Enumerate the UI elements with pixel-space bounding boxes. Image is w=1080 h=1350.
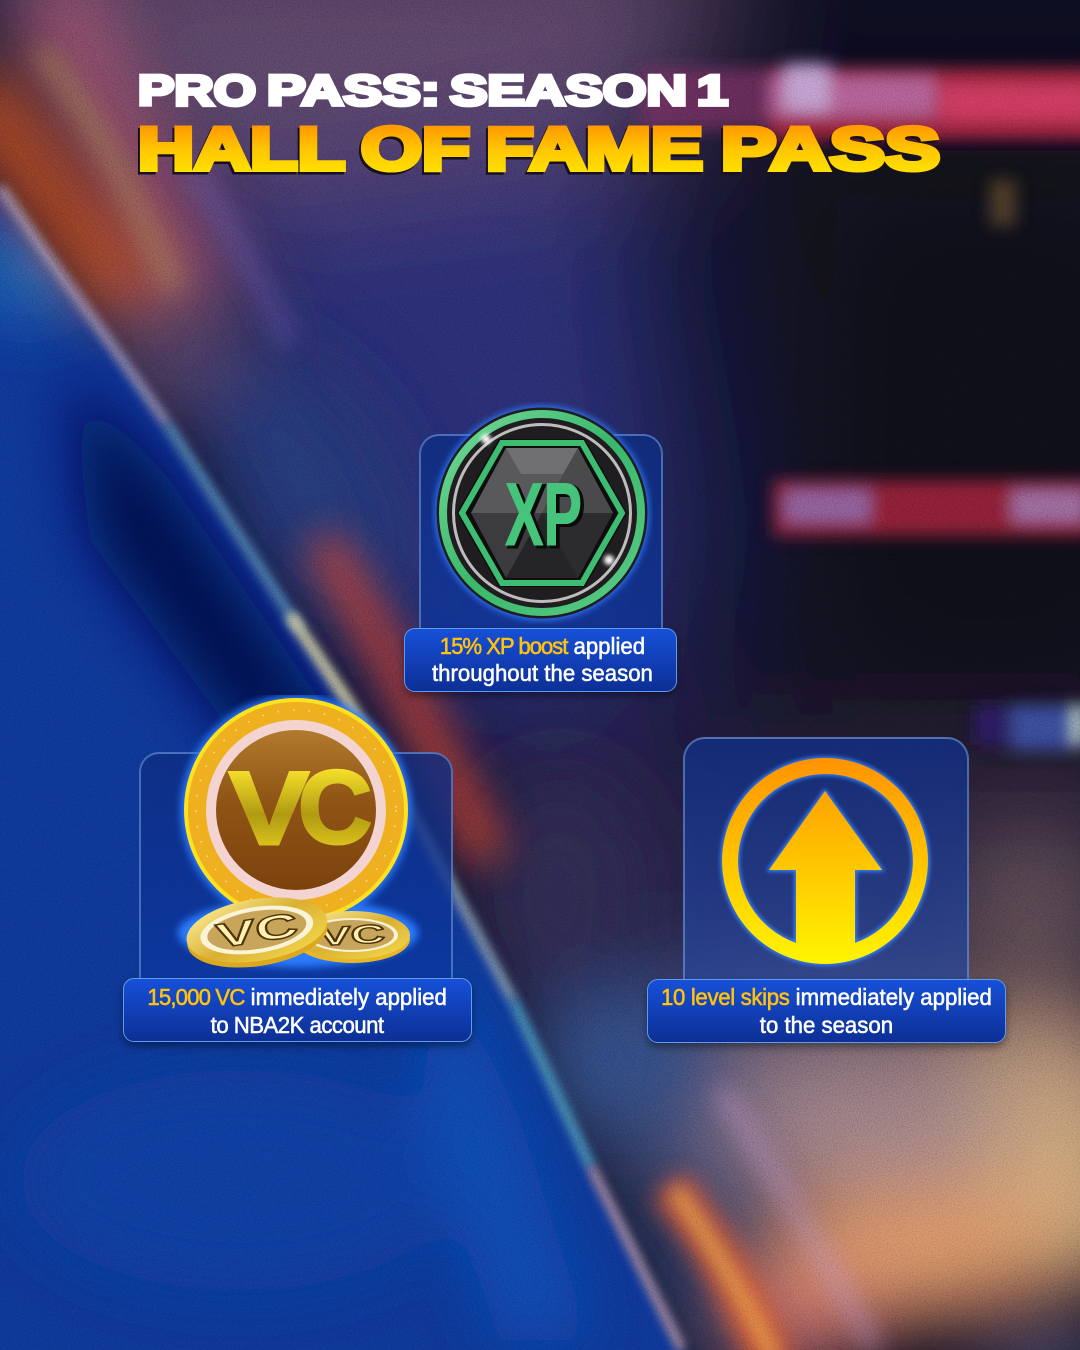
title line 2: FAME bbox=[486, 116, 703, 182]
caption: VC: to NBA2K account bbox=[211, 1012, 384, 1038]
VC letters: V bbox=[229, 751, 309, 867]
VC letters: C bbox=[298, 750, 372, 866]
icon: XP badge: XP bbox=[505, 464, 582, 564]
VC letters bbox=[229, 750, 372, 867]
small coin back: VC bbox=[318, 918, 386, 952]
caption: level skips bbox=[647, 979, 1006, 1043]
caption: VC bbox=[123, 978, 472, 1042]
caption: level skips: 10 level skips immediately applied bbox=[661, 984, 992, 1010]
title line 1 bbox=[138, 67, 728, 115]
title line 1: PRO bbox=[138, 67, 256, 115]
caption: XP boost bbox=[404, 628, 677, 692]
icon: XP badge bbox=[431, 402, 653, 624]
caption: level skips: to the season bbox=[760, 1012, 893, 1038]
small coin front bbox=[182, 888, 333, 977]
title line 1: PASS: bbox=[267, 67, 440, 115]
caption: XP boost: 15% XP boost applied bbox=[440, 632, 645, 658]
card: VC background bbox=[139, 752, 453, 978]
small coin back bbox=[294, 911, 410, 963]
caption: VC: 15,000 VC immediately applied bbox=[148, 984, 447, 1010]
caption: XP boost: throughout the season bbox=[432, 660, 653, 686]
small coin front: VC bbox=[214, 906, 300, 956]
title bbox=[136, 67, 940, 185]
title line 2: OF bbox=[359, 118, 468, 185]
card: XP background bbox=[419, 434, 663, 634]
blue foreground curve bbox=[0, 150, 700, 1350]
title line 1: 1 bbox=[697, 67, 728, 115]
title line 2: HALL bbox=[138, 116, 345, 182]
title line 2: PASS bbox=[721, 116, 940, 182]
panel: VC bbox=[118, 695, 476, 1050]
title line 2: HALL bbox=[136, 118, 343, 185]
title line 2: FAME bbox=[484, 118, 701, 185]
title line 2: OF bbox=[361, 116, 470, 182]
panel: level skips bbox=[643, 737, 1010, 1052]
red arena lights bbox=[640, 64, 1080, 750]
title line 1: SEASON bbox=[450, 67, 687, 115]
title line 2 bbox=[136, 116, 940, 185]
icon: XP badge: XP bbox=[508, 466, 585, 566]
title line 2: PASS bbox=[719, 118, 938, 185]
panel: XP boost bbox=[400, 402, 680, 700]
icon: VC coins bbox=[174, 695, 422, 972]
card: level skips background bbox=[683, 737, 969, 982]
icon: level up arrow bbox=[718, 754, 932, 968]
